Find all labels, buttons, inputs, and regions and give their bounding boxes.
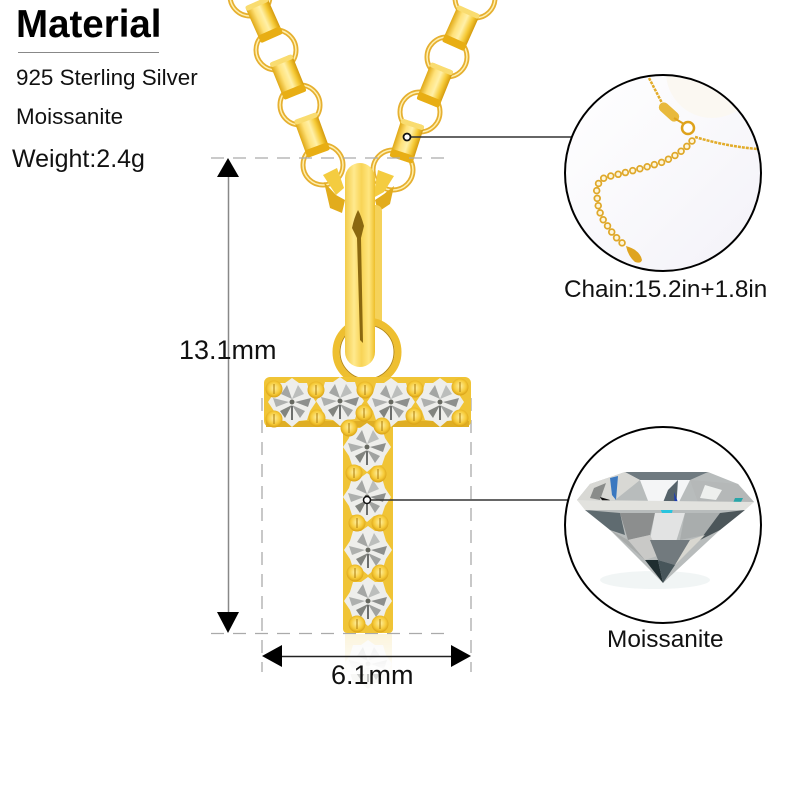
moissanite label: Moissanite xyxy=(607,626,724,653)
stone leader line xyxy=(364,496,570,504)
title: Material xyxy=(16,3,162,46)
prongs xyxy=(266,378,468,632)
necklace chain xyxy=(230,0,495,213)
chain leader line xyxy=(404,134,571,140)
T pendant with moissanite stones xyxy=(264,377,471,633)
material specification text: Moissanite xyxy=(16,104,123,129)
stones xyxy=(268,377,464,626)
chain length label: Chain:15.2in+1.8in xyxy=(564,276,767,303)
pendant reflection xyxy=(343,634,394,689)
width label: 6.1mm xyxy=(331,660,414,690)
material specification text: 925 Sterling Silver xyxy=(16,65,198,90)
moissanite detail circle xyxy=(565,427,761,623)
width dimension arrow xyxy=(262,645,471,667)
material specification text xyxy=(12,52,198,173)
pendant bail xyxy=(336,163,398,383)
material specification text: Weight:2.4g xyxy=(12,145,145,173)
height label: 13.1mm xyxy=(179,335,277,365)
chain detail circle xyxy=(564,74,762,272)
height dimension arrow xyxy=(217,158,239,633)
measurement guide lines xyxy=(211,158,471,672)
